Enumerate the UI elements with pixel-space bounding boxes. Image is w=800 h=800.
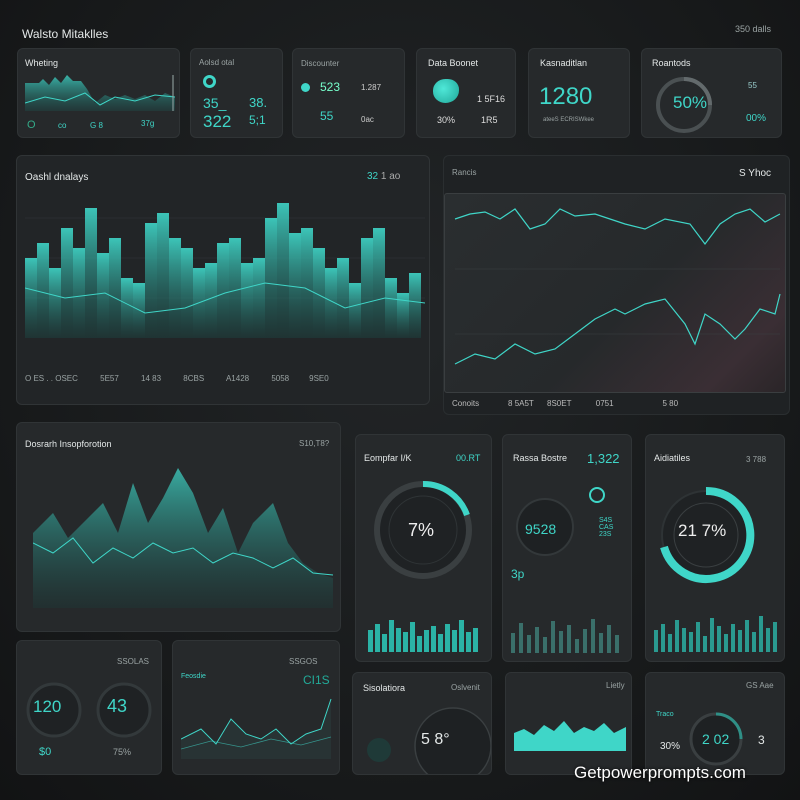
card: active stat: 5;1 bbox=[249, 113, 266, 127]
card: discounter: 1.287 bbox=[361, 83, 381, 92]
card: 202 gauge: GS Aae bbox=[746, 681, 774, 690]
card: wheting: 37g bbox=[141, 119, 154, 128]
card: active stat bbox=[190, 48, 283, 138]
card: active stat: Aolsd otal bbox=[199, 58, 234, 67]
panel: bar chart: 32 1 ao bbox=[367, 171, 400, 182]
card: 50% gauge: 50% bbox=[673, 93, 707, 112]
card: gauge 7%: Eompfar I/K bbox=[364, 453, 412, 463]
card: discounter: 0ac bbox=[361, 115, 374, 124]
gauge bbox=[374, 481, 472, 579]
card: active stat: 38. bbox=[249, 95, 267, 110]
panel: bar chart bbox=[16, 155, 430, 405]
card: 1280 bbox=[528, 48, 630, 138]
panel: line chart bbox=[443, 155, 790, 415]
panel: mountain chart: Dosrarh Insopforotion bbox=[25, 439, 112, 449]
card: data boost: 1R5 bbox=[481, 115, 498, 125]
panel: line chart: Rancis bbox=[452, 168, 476, 177]
wave bbox=[514, 721, 626, 751]
card: 8° bbox=[352, 672, 492, 775]
card: wheting: G 8 bbox=[90, 121, 103, 130]
card: 1280: ateeS ECRISWkee bbox=[543, 117, 594, 123]
card: discounter bbox=[292, 48, 405, 138]
card: 50% gauge: Roantods bbox=[652, 58, 691, 68]
line chart bbox=[181, 698, 332, 759]
card: 9528: 23S bbox=[599, 531, 611, 538]
ring bbox=[414, 707, 491, 774]
gauge bbox=[660, 487, 754, 584]
card: data boost bbox=[416, 48, 516, 138]
card: wave chart bbox=[505, 672, 632, 775]
card: 9528: Rassa Bostre bbox=[513, 453, 567, 463]
card: 9528: 1,322 bbox=[587, 451, 620, 466]
card: 120 / 43: 43 bbox=[107, 696, 127, 716]
title: Walsto Mitaklles bbox=[22, 27, 108, 41]
card: small line chart bbox=[172, 640, 340, 775]
card: 8°: Sisolatiora bbox=[363, 683, 405, 693]
card: 21% gauge: 21 7% bbox=[678, 521, 726, 540]
card: 9528: CAS bbox=[599, 524, 613, 531]
bar chart bbox=[25, 203, 425, 338]
mini area chart bbox=[25, 75, 175, 111]
mini bars bbox=[368, 620, 478, 652]
card: data boost: 1 5F16 bbox=[477, 94, 505, 104]
card: 9528: 9528 bbox=[525, 521, 556, 537]
ring left bbox=[26, 682, 82, 738]
ring bbox=[516, 487, 605, 556]
panel: bar chart: O ES . . OSEC 5E57 14 83 8CBS A1428 5058 9SE0 bbox=[25, 374, 329, 383]
card: 9528: 3p bbox=[511, 567, 524, 581]
dot icon bbox=[301, 83, 310, 92]
card: gauge 7%: 7% bbox=[408, 520, 434, 540]
card: 120 / 43: 75% bbox=[113, 747, 131, 757]
mini bars bbox=[654, 616, 777, 652]
card: 202 gauge: 3 bbox=[758, 733, 765, 747]
card: 202 gauge bbox=[645, 672, 785, 775]
panel: bar chart: Oashl dnalays bbox=[25, 172, 88, 183]
card: 1280: 1280 bbox=[539, 83, 592, 110]
card: discounter: Discounter bbox=[301, 59, 339, 68]
panel: mountain chart bbox=[16, 422, 341, 632]
card: discounter: 55 bbox=[320, 109, 333, 123]
card: wheting: Wheting bbox=[25, 58, 58, 68]
card: discounter: 523 bbox=[320, 80, 340, 94]
card: small line chart: SSGOS bbox=[289, 657, 317, 666]
area chart bbox=[33, 468, 333, 604]
card: 202 gauge: Traco bbox=[656, 711, 674, 718]
card: 21% gauge bbox=[645, 434, 785, 662]
card: 21% gauge: 3 788 bbox=[746, 455, 766, 464]
top right label: 350 dalls bbox=[735, 24, 771, 34]
mini bars bbox=[511, 619, 619, 653]
icon: sun bbox=[203, 75, 216, 88]
card: 120 / 43: SSOLAS bbox=[117, 657, 149, 666]
card: gauge 7%: 00.RT bbox=[456, 453, 480, 463]
card: data boost: Data Boonet bbox=[428, 58, 478, 68]
watermark: Getpowerprompts.com bbox=[574, 763, 746, 782]
card: active stat: 322 bbox=[203, 112, 231, 131]
card: gauge 7% bbox=[355, 434, 492, 662]
card: 120 / 43: $0 bbox=[39, 746, 51, 758]
card: 202 gauge: 2 02 bbox=[702, 731, 729, 747]
panel: line chart: Conoits 8 5A5T 8S0ET 0751 5 80 bbox=[452, 399, 678, 408]
panel: mountain chart: S10,T8? bbox=[299, 439, 329, 448]
card: 1280: Kasnaditlan bbox=[540, 58, 587, 68]
panel: line chart: S Yhoc bbox=[739, 168, 771, 179]
card: 50% gauge: 55 bbox=[748, 81, 757, 90]
card: wheting bbox=[17, 48, 180, 138]
card: active stat: 35_ bbox=[203, 95, 226, 111]
card: 50% gauge: 00% bbox=[746, 113, 766, 124]
card: 8°: 5 8° bbox=[421, 731, 450, 748]
card: wave chart: Lietly bbox=[606, 681, 625, 690]
card: 120 / 43 bbox=[16, 640, 162, 775]
card: data boost: 30% bbox=[437, 115, 455, 125]
card: 50% gauge bbox=[641, 48, 782, 138]
card: 9528: S4S bbox=[599, 517, 612, 524]
card: 21% gauge: Aidiatiles bbox=[654, 453, 690, 463]
card: 120 / 43: 120 bbox=[33, 697, 61, 716]
inner chart bbox=[444, 193, 786, 393]
card: 8°: Oslvenit bbox=[451, 683, 480, 692]
card: 9528 bbox=[502, 434, 632, 662]
card: small line chart: Feosdie bbox=[181, 673, 206, 680]
card: wheting: O bbox=[27, 119, 36, 131]
card: wheting: co bbox=[58, 121, 66, 130]
card: 202 gauge: 30% bbox=[660, 741, 680, 752]
gauge bbox=[656, 77, 712, 133]
card: small line chart: CI1S bbox=[303, 673, 330, 687]
blob icon bbox=[433, 79, 459, 103]
ring bbox=[690, 712, 742, 766]
ring right bbox=[96, 682, 152, 738]
